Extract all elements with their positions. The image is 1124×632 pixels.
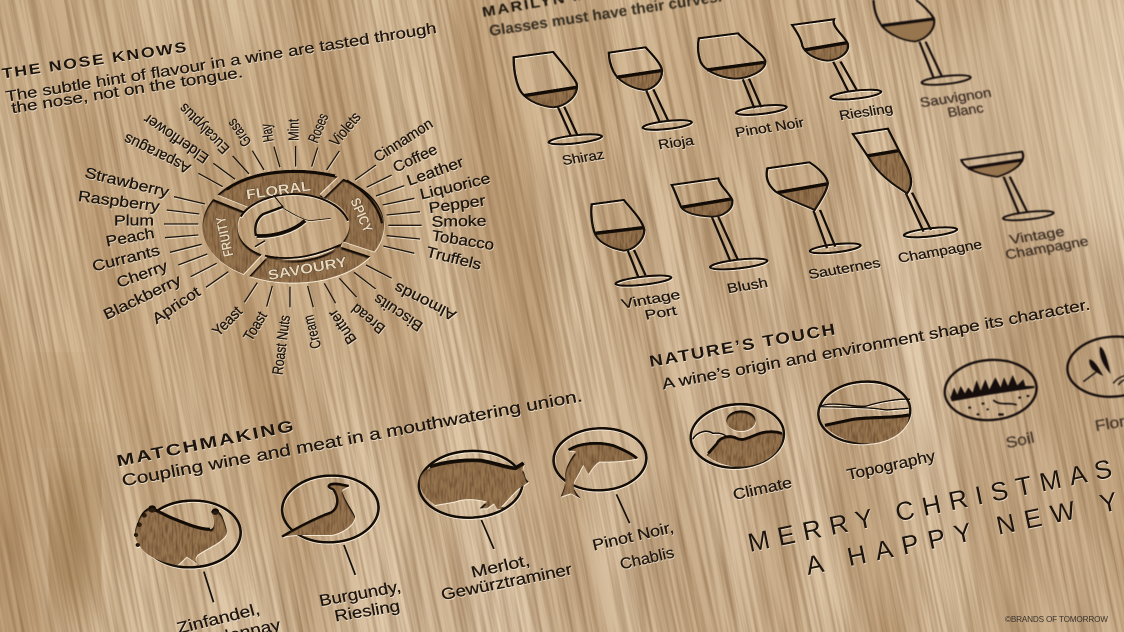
- far glass labels: [918, 85, 1090, 263]
- chart: aroma wheel ring: [203, 170, 384, 283]
- aroma labels: Blackberry: [101, 271, 184, 324]
- glass labels: Riesling: [838, 101, 894, 124]
- glass labels: [561, 101, 984, 323]
- glass: blush: [672, 178, 768, 272]
- heading: matchmaking: MATCHMAKING: [115, 418, 297, 470]
- pairing lines and labels: Gewürztraminer: [439, 560, 574, 604]
- far glass labels: Blanc: [946, 101, 985, 121]
- pairing lines and labels: Riesling: [333, 597, 401, 625]
- aroma labels: Truffels: [425, 244, 483, 274]
- glass: rioja: [609, 47, 692, 132]
- aroma labels: Apricot: [149, 283, 204, 328]
- pairing lines and labels: [175, 494, 630, 632]
- panel: nature's touch: [648, 297, 1124, 504]
- aroma labels: Raspberry: [77, 188, 161, 216]
- glass: sauternes: [767, 162, 861, 255]
- pinot noir chablis label: [591, 519, 676, 573]
- christmas greeting: MERRY CHRISTMAS: [745, 453, 1115, 558]
- icon: soil: [943, 357, 1039, 423]
- glass labels: Port: [643, 303, 679, 323]
- aroma labels: [77, 100, 495, 376]
- glass labels: Champagne: [896, 237, 984, 266]
- nature labels: [731, 448, 937, 504]
- pairing lines and labels: Merlot,: [469, 551, 532, 581]
- glass: champagne: [853, 129, 958, 239]
- aroma labels: Leather: [405, 154, 466, 190]
- icon: pig: [417, 449, 529, 520]
- aroma labels: Currants: [91, 242, 162, 275]
- aroma labels: Peach: [104, 225, 156, 251]
- glass: vintage champagne: [961, 152, 1054, 222]
- nose description text: The subtle hint of flavour in a wine are tasted through: [5, 20, 438, 106]
- icon: fish: [552, 426, 648, 498]
- chart: aroma wheel spokes: [164, 146, 422, 307]
- glass labels: Sauternes: [807, 255, 882, 283]
- aroma labels: Liquorice: [418, 170, 492, 203]
- icon: wheel centre wine glass: [255, 195, 331, 247]
- aroma labels: Eucalyptus: [176, 100, 233, 157]
- heading: the nose knows: THE NOSE KNOWS: [1, 40, 189, 83]
- aroma labels: Cinnamon: [371, 115, 436, 166]
- aroma labels: Toast: [240, 308, 271, 344]
- wheel category labels: FLORAL: [245, 177, 312, 202]
- aroma labels: Violets: [327, 109, 365, 150]
- icon: topography: [816, 379, 912, 446]
- aroma labels: Elderflower: [141, 110, 212, 167]
- icon: goose: [280, 473, 380, 545]
- heading: nature's touch: NATURE’S TOUCH: [648, 321, 838, 371]
- aroma labels: Butter: [325, 306, 360, 347]
- icon: turkey: [134, 498, 243, 570]
- aroma labels: Tobacco: [430, 227, 495, 254]
- wheel category labels: SAVOURY: [267, 253, 349, 283]
- wheel category labels: FRUITY: [212, 215, 236, 258]
- nature labels: Climate: [731, 474, 794, 504]
- glass: sauvignon blanc: [873, 0, 971, 87]
- glass labels: Rioja: [657, 133, 696, 153]
- icon: flora: [1065, 334, 1124, 400]
- nose description text: the nose, not on the tongue.: [10, 64, 244, 117]
- copyright credit: ©BRANDS OF TOMORROW: [1005, 615, 1108, 624]
- aroma labels: Asparagus: [121, 130, 193, 177]
- aroma labels: Plum: [114, 212, 154, 229]
- glass labels: Pinot Noir: [734, 115, 806, 141]
- aroma labels: Almonds: [392, 279, 459, 324]
- aroma labels: Smoke: [431, 213, 487, 231]
- wheel category labels: SPICY: [347, 195, 376, 235]
- far glass labels: Champagne: [1004, 234, 1090, 263]
- icon: climate: [689, 401, 786, 471]
- panel: marilyn glasses: [481, 0, 1090, 323]
- nature labels: Topography: [845, 448, 937, 484]
- aroma labels: Bread: [348, 300, 389, 337]
- aroma labels: Biscuits: [371, 290, 426, 335]
- aroma labels: Roses: [305, 111, 332, 145]
- aroma labels: Mint: [285, 118, 302, 141]
- nose description text: [5, 20, 438, 117]
- glass labels: Vintage: [620, 287, 682, 312]
- aroma labels: Yeast: [209, 303, 246, 340]
- panel: the nose knows: [1, 20, 495, 376]
- glass: riesling: [792, 19, 882, 102]
- pinot noir chablis label: Pinot Noir,: [591, 519, 676, 555]
- aroma labels: Pepper: [428, 192, 487, 217]
- far nature labels: Soil: [1004, 430, 1036, 452]
- aroma labels: Cream: [300, 313, 325, 350]
- aroma labels: Hay: [258, 122, 278, 143]
- aroma labels: Roast Nuts: [269, 314, 294, 376]
- nature description text: A wine’s origin and environment shape its character.: [661, 297, 1092, 393]
- glass labels: Shiraz: [561, 147, 606, 169]
- far glass labels: Sauvignon: [918, 85, 993, 111]
- wheel category labels: [212, 177, 376, 283]
- glass: pinot noir: [698, 33, 787, 117]
- glass: shiraz: [514, 52, 602, 146]
- pinot noir chablis label: Chablis: [619, 544, 676, 573]
- glass: vintage port: [591, 200, 672, 288]
- matchmaking description text: Coupling wine and meat in a mouthwatering union.: [120, 387, 584, 490]
- aroma labels: Grass: [224, 115, 255, 150]
- aroma labels: Cherry: [114, 257, 171, 292]
- glass labels: Blush: [726, 275, 769, 297]
- aroma labels: Coffee: [390, 141, 440, 176]
- aroma labels: Strawberry: [83, 164, 171, 201]
- far glass labels: Vintage: [1008, 224, 1066, 248]
- panel: matchmaking: [115, 387, 676, 632]
- pairing lines and labels: Burgundy,: [318, 577, 403, 610]
- far nature labels: [1004, 411, 1124, 452]
